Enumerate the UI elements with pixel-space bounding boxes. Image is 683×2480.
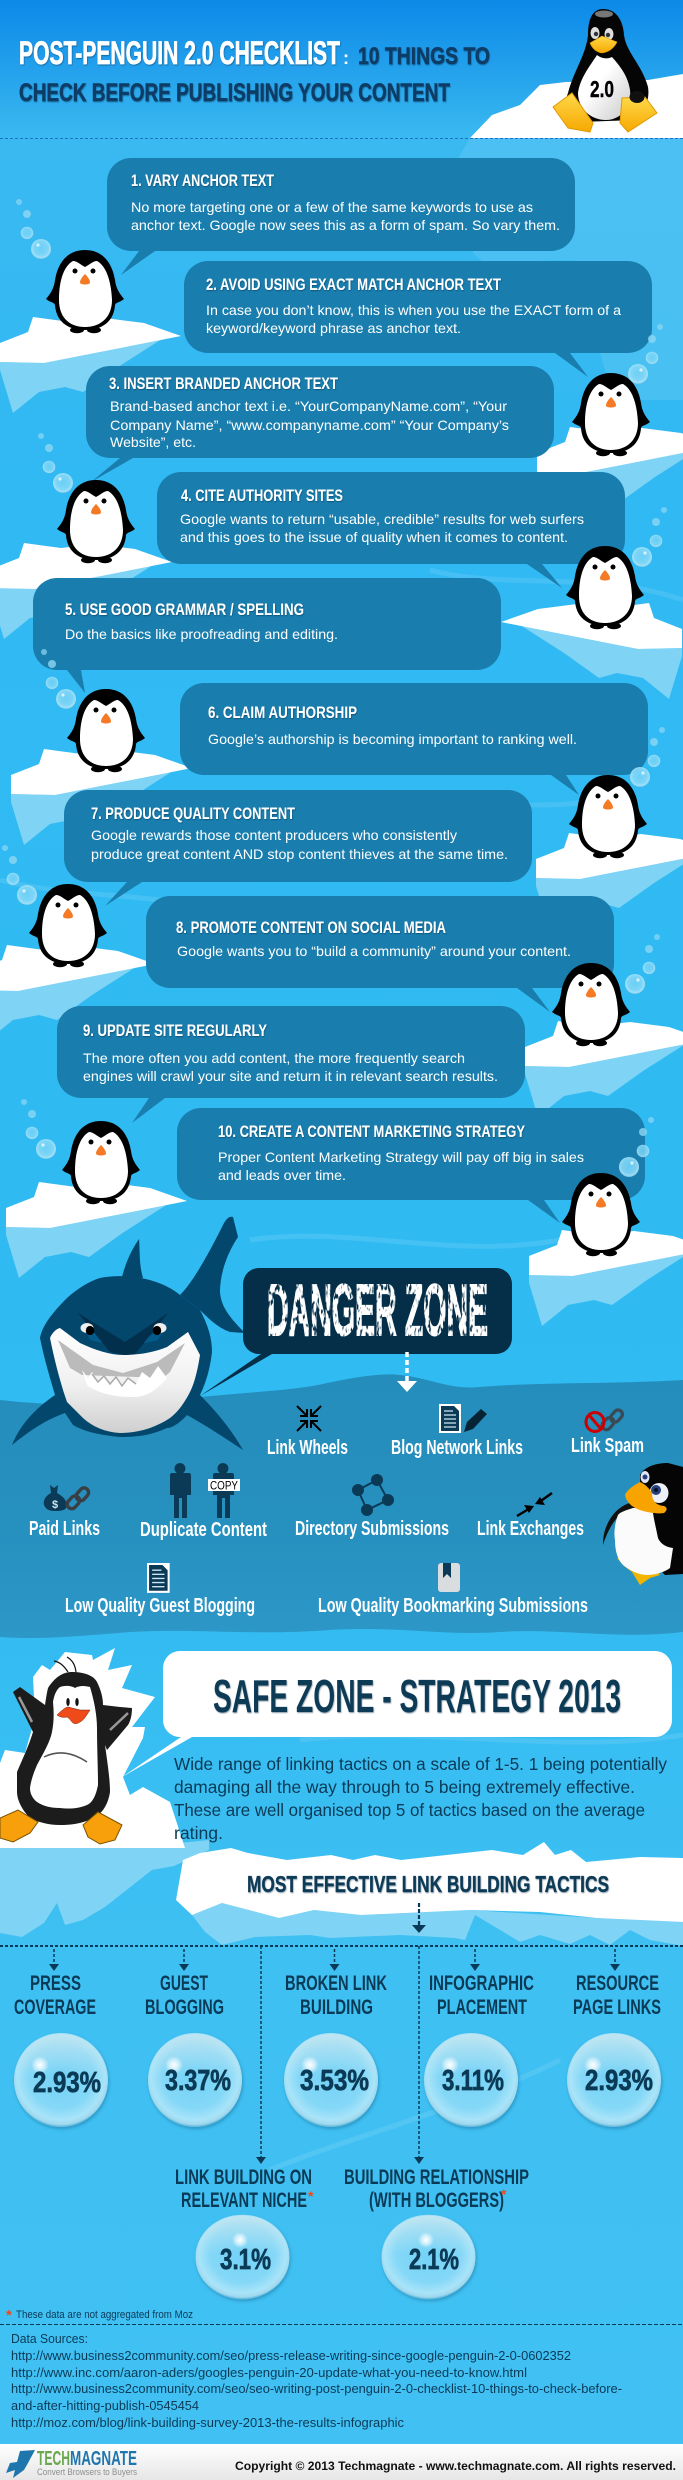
footer: [0, 2444, 683, 2480]
item: link wheels: [267, 1406, 348, 1459]
logo: TECH: [37, 2448, 70, 2470]
tactic: broken link building: 3.53%: [300, 2065, 369, 2097]
tip 9 bubble: The more often you add content, the more frequently search: [83, 1050, 465, 1066]
tactic: guest blogging: [145, 1972, 242, 2127]
tactic: resource page links: [567, 1972, 661, 2127]
data sources: http://moz.com/blog/link-building-survey-2013-the-results-infographic: [11, 2415, 404, 2430]
intro text: [174, 1754, 667, 1843]
tactic: building relationship with bloggers: (WITH BLOGGERS): [369, 2189, 504, 2212]
shark: [12, 1217, 245, 1450]
tactic: building relationship with bloggers: *: [501, 2186, 507, 2202]
icon: tux 2.0: [553, 9, 657, 132]
tip 8 bubble: Google wants you to “build a community” around your content.: [177, 943, 571, 959]
tactic: infographic placement: [424, 1972, 534, 2127]
footnote: *: [6, 2307, 12, 2324]
tip 1 bubble: anchor text. Google now sees this as a form of spam. So vary them.: [131, 217, 560, 233]
water streaks: [0, 570, 683, 2170]
item: link spam: Link Spam: [571, 1435, 644, 1457]
tactic: link building on relevant niche: RELEVANT NICHE: [181, 2189, 307, 2212]
panel: safe zone: [0, 1648, 683, 2299]
item: duplicate content: Duplicate Content: [140, 1519, 267, 1541]
tip 1 bubble: No more targeting one or a few of the same keywords to use as: [131, 199, 533, 215]
tip 2 bubble: keyword/keyword phrase as anchor text.: [206, 320, 461, 336]
intro text: Wide range of linking tactics on a scale of 1-5. 1 being potentially: [174, 1754, 667, 1774]
item: directory submissions: [295, 1474, 449, 1540]
tip 3 bubble: Website”, etc.: [110, 434, 196, 450]
tip 4 bubble: 4. CITE AUTHORITY SITES: [181, 486, 343, 505]
tactic: broken link building: BROKEN LINK: [285, 1972, 387, 1995]
tactic: link building on relevant niche: LINK BUILDING ON: [175, 2166, 312, 2189]
header: [0, 0, 683, 400]
tip 7 bubble: [64, 790, 532, 906]
intro text: damaging all the way through to 5 being extremely effective.: [174, 1777, 635, 1797]
item: link exchanges: Link Exchanges: [477, 1518, 584, 1540]
tip 2 bubble: In case you don’t know, this is when you use the EXACT form of a: [206, 302, 621, 318]
tactic: infographic placement: INFOGRAPHIC: [429, 1972, 534, 1995]
icon: cartoon tux looking up: [603, 1463, 683, 1585]
tactic: broken link building: BUILDING: [300, 1996, 373, 2019]
item: low quality guest blogging: [65, 1563, 255, 1617]
tip 2 bubble: [184, 261, 652, 377]
danger zone sign: [200, 1268, 512, 1396]
item: link wheels: Link Wheels: [267, 1437, 348, 1459]
logo: Convert Browsers to Buyers: [37, 2467, 137, 2478]
item: blog network links: [391, 1404, 523, 1459]
logo: MAGNATE: [70, 2448, 137, 2470]
panel: checklist bubbles: [33, 158, 652, 1223]
iceberg: [470, 74, 683, 138]
footnote: These data are not aggregated from Moz: [16, 2309, 193, 2321]
tip 8 bubble: [146, 896, 614, 1012]
tactic: building relationship with bloggers: [344, 2166, 529, 2299]
tactic: link building on relevant niche: 3.1%: [220, 2244, 271, 2276]
tip 1 bubble: 1. VARY ANCHOR TEXT: [131, 171, 274, 190]
tip 7 bubble: 7. PRODUCE QUALITY CONTENT: [91, 804, 295, 823]
item: duplicate content: COPY: [210, 1478, 238, 1492]
angry penguin: [0, 1657, 132, 1844]
tactic: press coverage: 2.93%: [33, 2067, 101, 2099]
tip 9 bubble: engines will crawl your site and return it in relevant search results.: [83, 1068, 498, 1084]
tip 10 bubble: [177, 1108, 645, 1223]
item: paid links: Paid Links: [29, 1518, 100, 1540]
iceberg under water: [459, 138, 683, 400]
tactic: infographic placement: PLACEMENT: [437, 1996, 527, 2019]
item: duplicate content: [140, 1463, 267, 1541]
data sources: Data Sources:: [11, 2331, 88, 2346]
air bubbles: [2, 199, 667, 1177]
item: blog network links: Blog Network Links: [391, 1437, 523, 1459]
tip 6 bubble: Google’s authorship is becoming important to ranking well.: [208, 731, 577, 747]
tip 5 bubble: Do the basics like proofreading and editing.: [65, 626, 338, 642]
tip 10 bubble: Proper Content Marketing Strategy will pay off big in sales: [218, 1149, 584, 1165]
tree connectors: [0, 1946, 683, 2164]
tip 2 bubble: 2. AVOID USING EXACT MATCH ANCHOR TEXT: [206, 275, 501, 294]
tactic: link building on relevant niche: *: [308, 2188, 314, 2204]
tip 4 bubble: [157, 472, 625, 588]
tip 3 bubble: [86, 366, 554, 482]
item: link spam: [571, 1408, 644, 1457]
tip 7 bubble: Google rewards those content producers who consistently: [91, 827, 457, 843]
tip 8 bubble: 8. PROMOTE CONTENT ON SOCIAL MEDIA: [176, 918, 446, 937]
tip 6 bubble: [180, 683, 648, 795]
data sources: and-after-hitting-publish-0545454: [11, 2398, 199, 2413]
logo: [6, 2448, 137, 2478]
tactic: press coverage: PRESS: [30, 1972, 81, 1995]
tip 9 bubble: 9. UPDATE SITE REGULARLY: [83, 1021, 268, 1040]
tactic: link building on relevant niche: [175, 2166, 314, 2299]
speech bubble: [122, 1651, 672, 1777]
intro text: These are well organised top 5 of tactics based on the average: [174, 1800, 645, 1820]
tactic: press coverage: [14, 1972, 108, 2127]
arrow: [397, 1352, 417, 1392]
title: CHECK BEFORE PUBLISHING YOUR CONTENT: [19, 79, 450, 107]
tip 9 bubble: [57, 1006, 525, 1123]
arrow: [412, 1903, 426, 1933]
header sky: [0, 0, 683, 138]
tactic: resource page links: 2.93%: [585, 2065, 653, 2097]
icon: tux 2.0: 2.0: [590, 76, 614, 102]
tip 7 bubble: produce great content AND stop content thieves at the same time.: [91, 846, 508, 862]
tactic: guest blogging: GUEST: [160, 1972, 208, 1995]
title: :: [343, 48, 349, 68]
ice shelf: [176, 1842, 683, 1946]
tip 3 bubble: 3. INSERT BRANDED ANCHOR TEXT: [109, 374, 338, 393]
tip 4 bubble: Google wants to return “usable, credible” results for web surfers: [180, 511, 584, 527]
ice floes under the checklist penguins: [0, 317, 683, 1326]
penguins beside the tips: [29, 250, 650, 1256]
data sources: http://www.inc.com/aaron-aders/googles-penguin-20-update-what-you-need-to-know.html: [11, 2365, 527, 2380]
tactic: infographic placement: 3.11%: [442, 2065, 504, 2097]
tactic: building relationship with bloggers: BUILDING RELATIONSHIP: [344, 2166, 529, 2189]
data sources: http://www.business2community.com/seo/seo-writing-post-penguin-2-0-checklist-10-things-to-check-before-: [11, 2381, 622, 2396]
tactic: building relationship with bloggers: 2.1%: [409, 2244, 459, 2276]
tip 10 bubble: 10. CREATE A CONTENT MARKETING STRATEGY: [218, 1122, 526, 1141]
tip 4 bubble: and this goes to the issue of quality when it comes to content.: [180, 529, 568, 545]
data sources: [11, 2331, 622, 2430]
tip 6 bubble: 6. CLAIM AUTHORSHIP: [208, 703, 357, 722]
title: [19, 35, 490, 107]
tactic: guest blogging: 3.37%: [165, 2065, 231, 2097]
tip 5 bubble: 5. USE GOOD GRAMMAR / SPELLING: [65, 600, 304, 619]
item: low quality guest blogging: Low Quality Guest Blogging: [65, 1595, 255, 1617]
item: directory submissions: Directory Submissions: [295, 1518, 449, 1540]
tip 5 bubble: [33, 578, 501, 693]
tactic: broken link building: [284, 1972, 387, 2127]
angry penguin ice: [0, 1648, 209, 1937]
tactic: press coverage: COVERAGE: [14, 1996, 96, 2019]
copyright: Copyright © 2013 Techmagnate - www.techmagnate.com. All rights reserved.: [235, 2459, 676, 2473]
item: low quality bookmarking submissions: [318, 1563, 588, 1617]
panel: danger zone: [0, 1217, 683, 1638]
title: 10 THINGS TO: [358, 43, 490, 70]
tip 1 bubble: [107, 158, 575, 275]
footnote: [6, 2307, 193, 2324]
tip 3 bubble: Company Name”, “www.companyname.com” “Your Company’s: [110, 417, 509, 433]
item: paid links: $: [52, 1499, 58, 1511]
tip 3 bubble: Brand-based anchor text i.e. “YourCompanyName.com”, “Your: [110, 398, 507, 414]
deep water band: [0, 1374, 683, 1638]
title: POST-PENGUIN 2.0 CHECKLIST: [19, 35, 340, 71]
intro text: rating.: [174, 1823, 223, 1843]
data sources: http://www.business2community.com/seo/press-release-writing-since-google-penguin-2-0-0602352: [11, 2348, 571, 2363]
item: paid links: [29, 1485, 100, 1540]
tactic: guest blogging: BLOGGING: [145, 1996, 224, 2019]
item: link exchanges: [477, 1493, 584, 1540]
tip 10 bubble: and leads over time.: [218, 1167, 346, 1183]
